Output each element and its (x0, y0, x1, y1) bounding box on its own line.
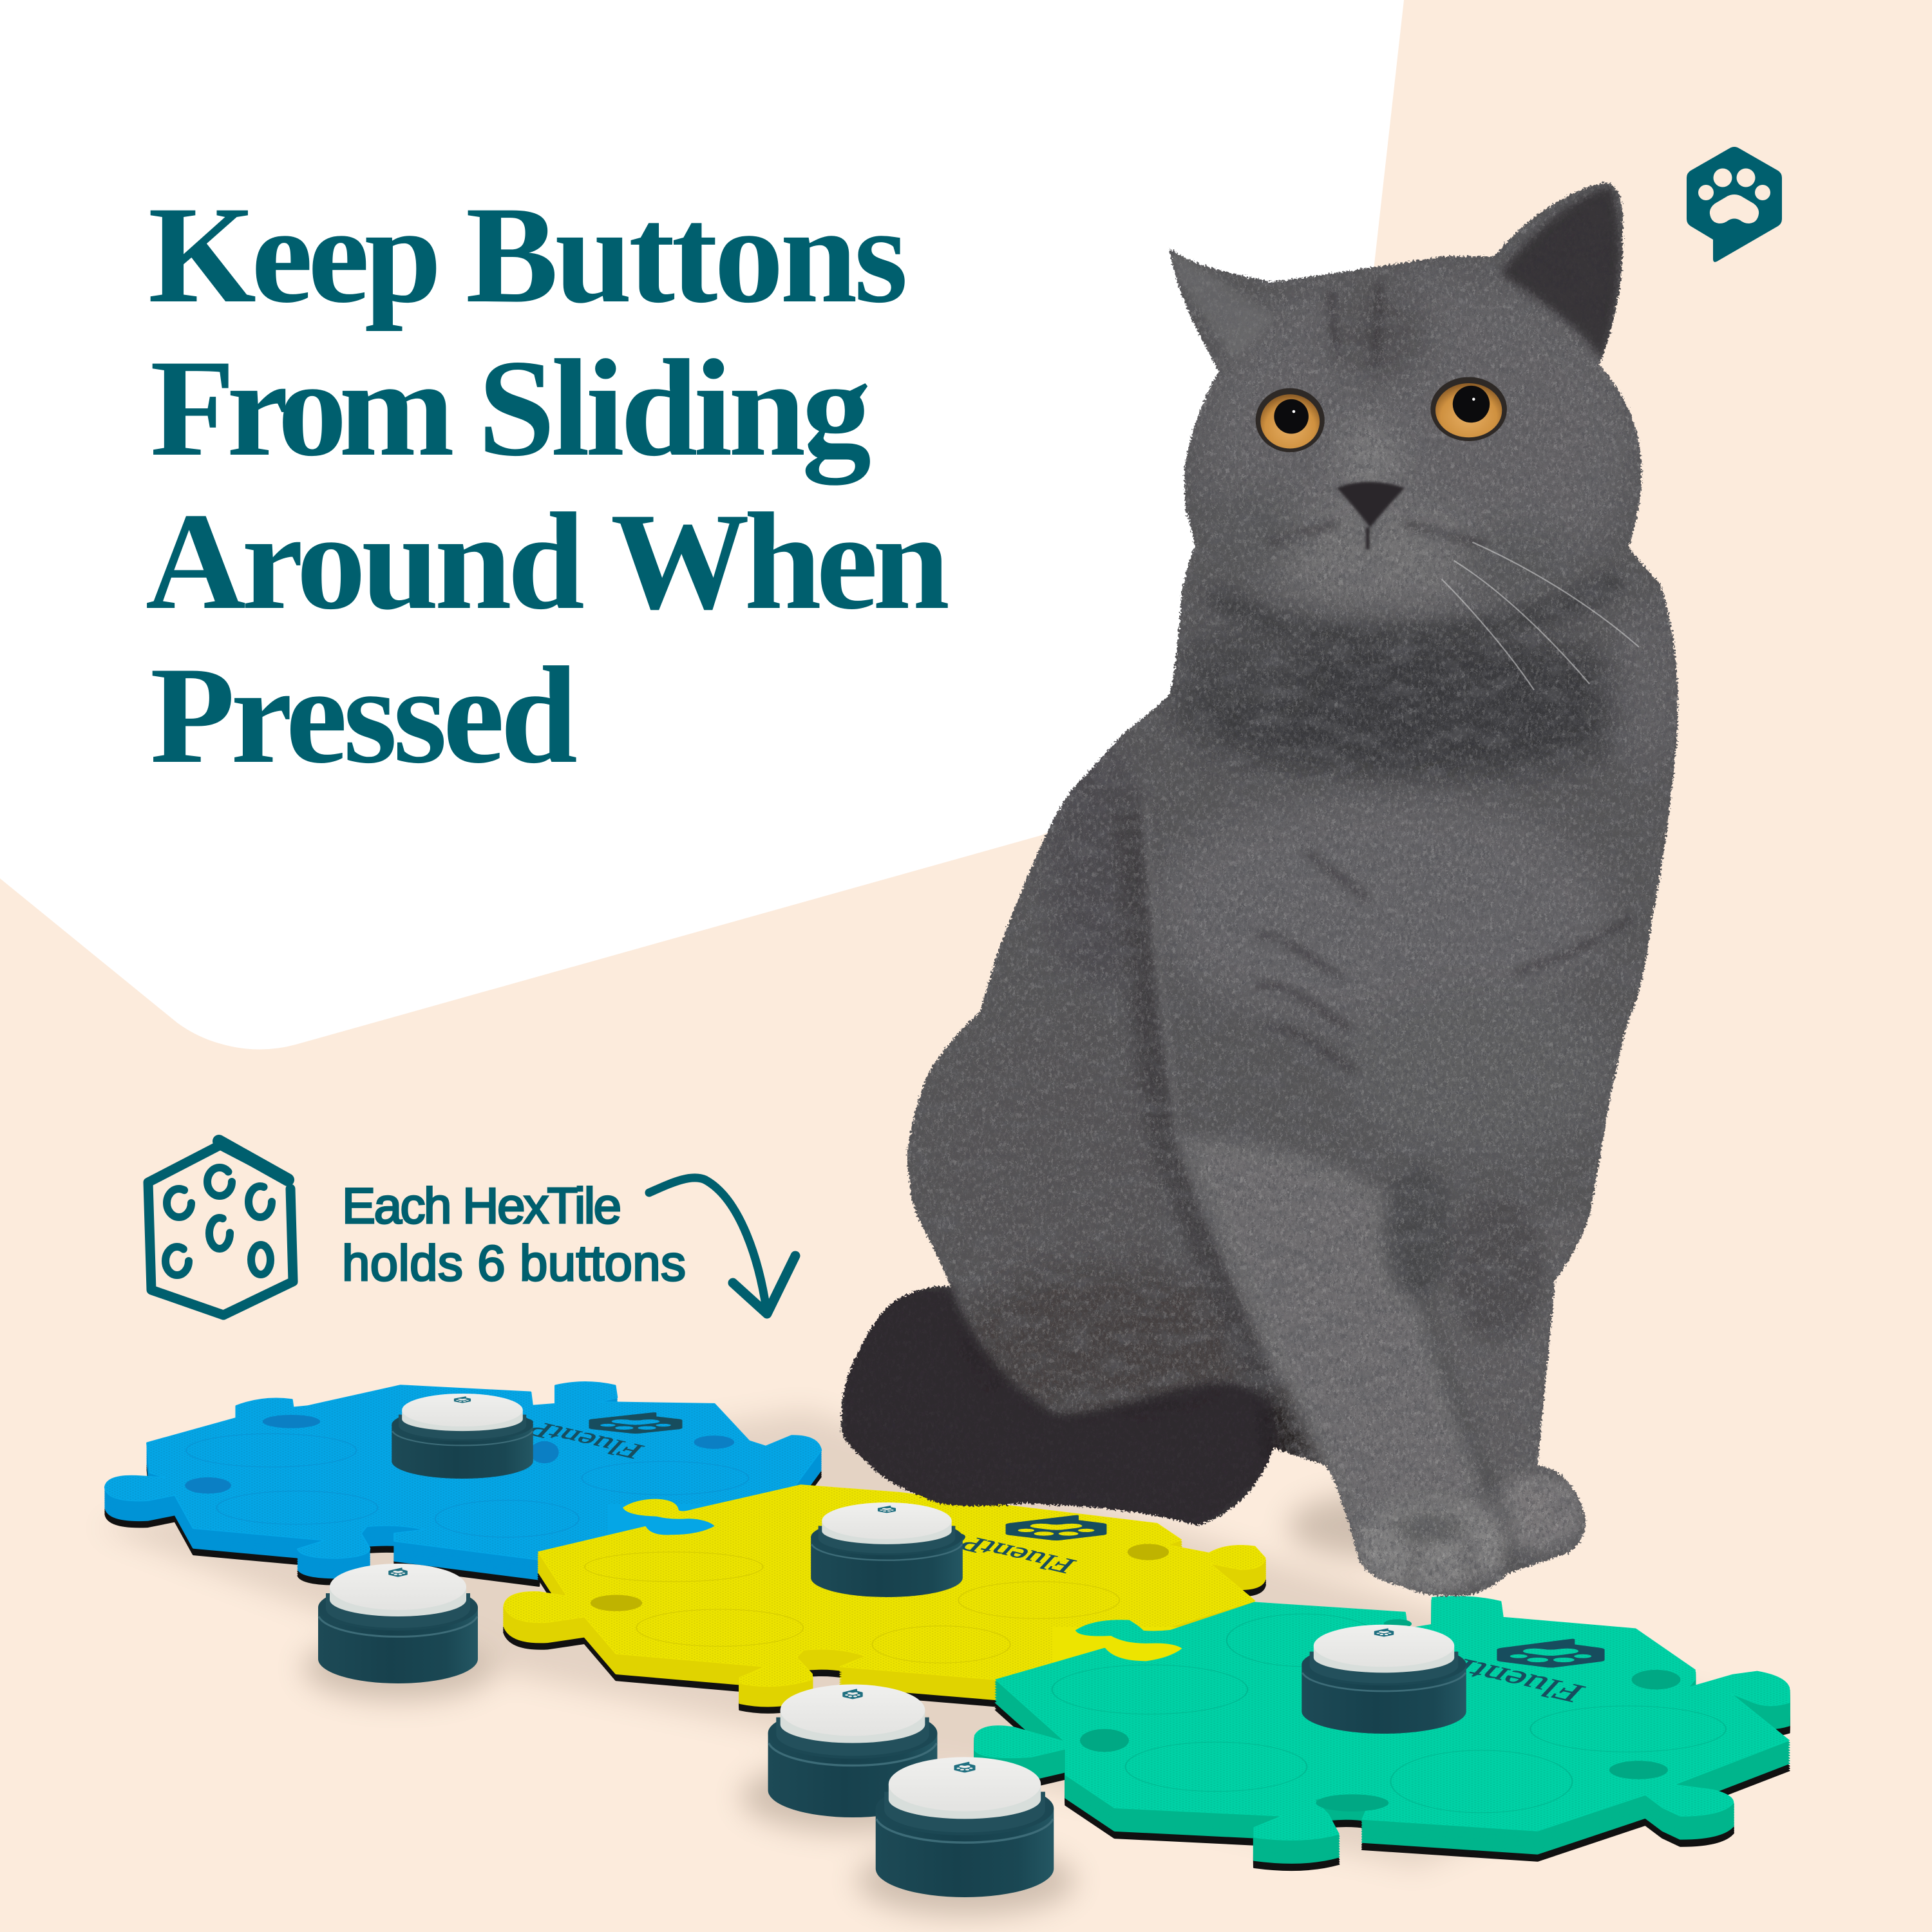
green hextile (975, 1596, 1789, 1870)
button on yellow tile (811, 1502, 963, 1597)
loose button center (768, 1685, 937, 1817)
cat right ear (1501, 187, 1620, 360)
blue hextile (106, 1382, 820, 1586)
title: Around (146, 484, 585, 638)
cat fur body (840, 182, 1680, 1597)
white angled panel (0, 0, 1404, 1050)
title (146, 178, 950, 792)
cat coat ripples (1255, 283, 1633, 1072)
title: Buttons (466, 178, 908, 332)
cat front legs (1180, 1139, 1589, 1591)
text: each hextile holds 6 buttons (342, 1177, 686, 1291)
fur highlights (811, 167, 1726, 1623)
cat whiskers (1442, 542, 1639, 690)
loose button left (318, 1564, 478, 1683)
title: Pressed (150, 638, 578, 792)
title: When (611, 484, 950, 638)
cat tail (838, 1282, 1282, 1534)
text: each hextile holds 6 buttons: Each HexTile (342, 1177, 621, 1234)
tile shadows (97, 1410, 1771, 1916)
loose button front (876, 1757, 1054, 1897)
cat nose and mouth (1337, 482, 1405, 549)
yellow tile logo and wordmark: FluentPet (927, 1526, 1082, 1578)
cat right eye (1430, 377, 1507, 441)
icon: hextile with six buttons (148, 1141, 293, 1315)
button on blue tile (392, 1394, 533, 1479)
haunch and chest edge (1128, 802, 1329, 1466)
yellow hextile (504, 1485, 1265, 1713)
cat photo illustration (840, 182, 1680, 1597)
cat face details (1256, 377, 1639, 690)
head lower edge (1214, 579, 1620, 638)
cat left ear (1170, 248, 1275, 360)
arrow: pointing down to tiles (649, 1178, 795, 1314)
fur texture (811, 167, 1726, 1623)
cat left eye (1256, 388, 1325, 452)
dark gap behind legs (1265, 1381, 1328, 1470)
large fur patches (845, 182, 1674, 1587)
icon: brand logo (1687, 147, 1782, 262)
title: Keep (148, 178, 442, 332)
blue tile logo and wordmark: FluentPet (495, 1411, 650, 1463)
green tile logo and wordmark: FluentPet (1405, 1644, 1592, 1708)
text: each hextile holds 6 buttons: holds 6 buttons (342, 1235, 686, 1291)
button on green tile (1302, 1625, 1466, 1734)
title: Sliding (478, 331, 871, 486)
title: From (150, 331, 455, 485)
